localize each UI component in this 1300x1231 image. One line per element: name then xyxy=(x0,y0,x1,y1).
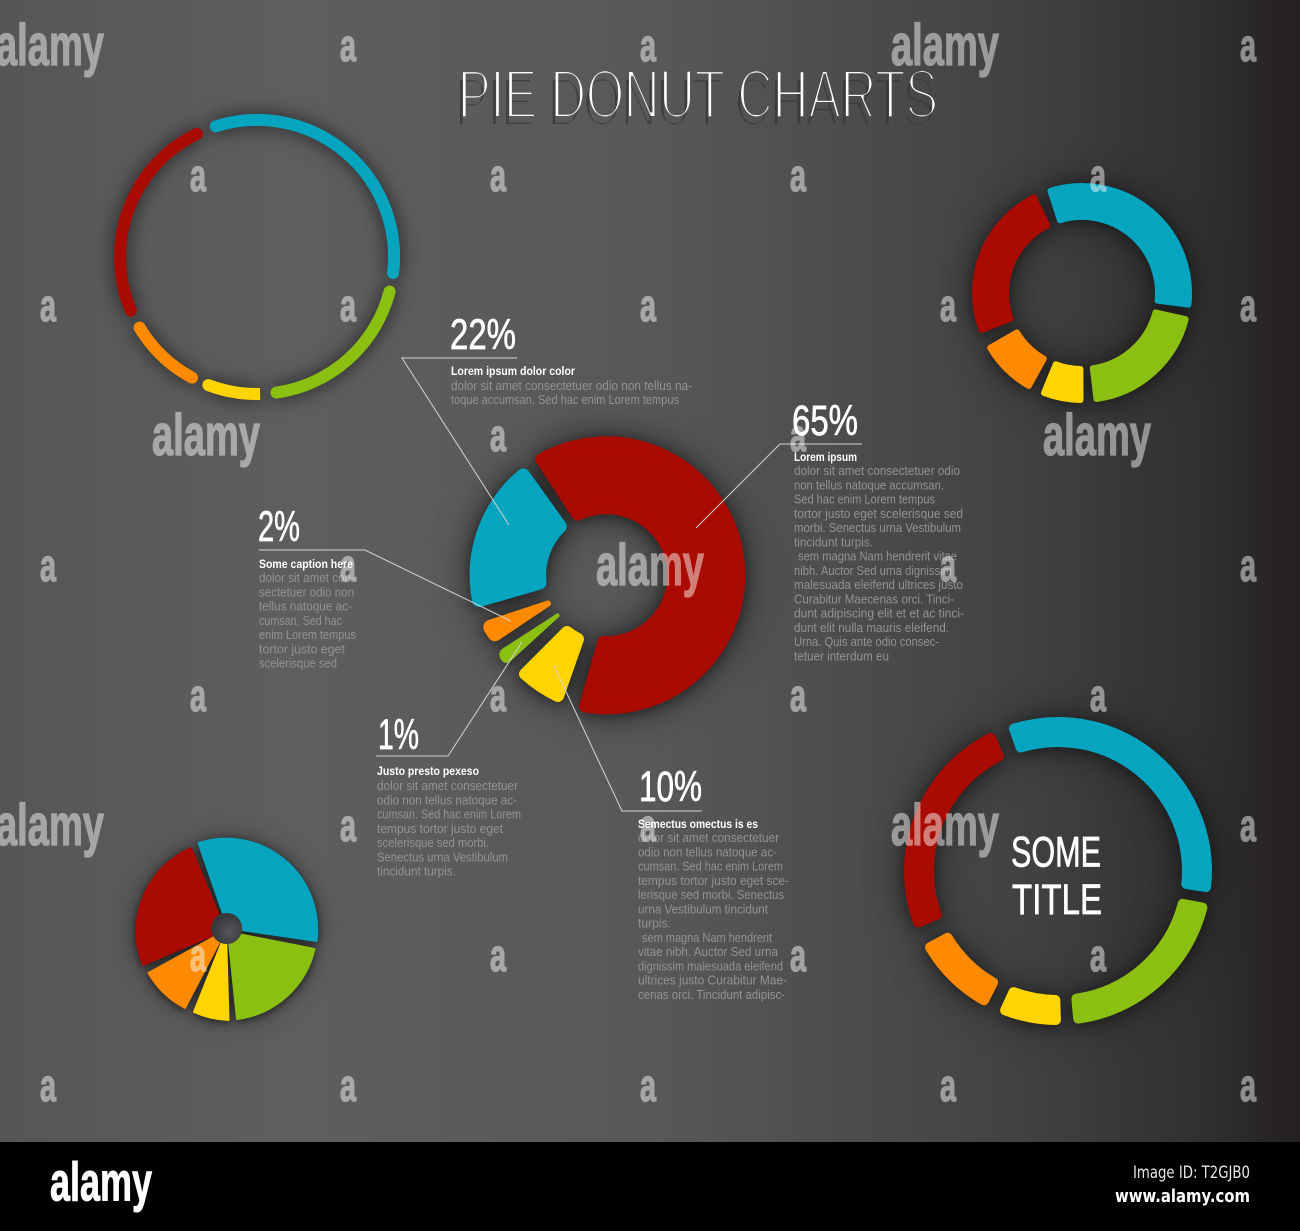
callout: 1%: odio non tellus natoque ac- xyxy=(377,793,517,807)
callout: 2%: Some caption here xyxy=(259,557,353,571)
callout: 1%: dolor sit amet consectetuer xyxy=(377,779,518,793)
callout: 65%: nibh. Auctor Sed urna dignissim xyxy=(794,564,952,578)
leader line: 1% xyxy=(376,642,522,756)
callout: 65%: tincidunt turpis. xyxy=(794,535,873,549)
callout: 10%: dolor sit amet consectetuer xyxy=(638,831,779,845)
callout: 65%: Lorem ipsum xyxy=(794,450,857,464)
donut: yellow segment xyxy=(1044,364,1080,400)
callout: 1%: cumsan. Sed hac enim Lorem xyxy=(377,808,521,822)
watermarks: alamy xyxy=(1043,403,1151,468)
thin ring: yellow segment xyxy=(208,385,260,394)
watermarks: a xyxy=(340,280,357,331)
thin ring: green segment xyxy=(276,292,390,393)
callout: 65%: sem magna Nam hendrerit vitae xyxy=(798,550,957,564)
central donut: blue 22% segment xyxy=(477,476,560,600)
donut chart top right xyxy=(975,186,1189,400)
watermarks: a xyxy=(40,280,57,331)
callout: 10%: lerisque sed morbi. Senectus xyxy=(638,888,784,902)
titled donut: red segment xyxy=(909,738,999,922)
watermarks: a xyxy=(490,410,507,461)
watermarks: a xyxy=(1090,930,1107,981)
leader line: 10% xyxy=(554,666,702,811)
callout: 10%: sem magna Nam hendrerit xyxy=(642,931,772,945)
central donut: yellow 10% segment xyxy=(525,632,578,696)
pie chart bottom left xyxy=(137,839,317,1020)
watermarks: a xyxy=(1240,1060,1257,1111)
callout: 10%: vitae nibh. Auctor Sed urna xyxy=(638,945,778,959)
watermarks: alamy xyxy=(0,13,104,78)
callout: 65%: morbi. Senectus urna Vestibulum xyxy=(794,521,961,535)
callout: 2% xyxy=(258,503,356,671)
watermarks: a xyxy=(490,150,507,201)
centre title of donut: SOME xyxy=(1011,828,1101,876)
callout: 2%: tellus natoque ac- xyxy=(259,600,352,614)
callout: 10% xyxy=(638,763,789,1002)
callout: 2%: 2% xyxy=(258,503,300,551)
callout: 10%: 10% xyxy=(639,763,702,811)
callout: 1%: tempus tortor justo eget xyxy=(377,822,503,836)
footer logo: alamy xyxy=(50,1150,152,1212)
callout: 1%: Justo presto pexeso xyxy=(377,764,479,778)
callout: 2%: sectetuer odio non xyxy=(259,585,354,599)
title xyxy=(455,55,938,141)
callout: 1% xyxy=(377,711,521,879)
watermarks: a xyxy=(340,20,357,71)
central donut: green 1% segment xyxy=(501,616,558,661)
callout: 2%: dolor sit amet con- xyxy=(259,571,355,585)
footer url: www.alamy.com xyxy=(1115,1186,1250,1207)
callout: 1%: 1% xyxy=(378,711,419,759)
pie: red wedge xyxy=(137,848,225,965)
callout: 22%: toque accumsan. Sed hac enim Lorem tempus xyxy=(451,393,679,407)
titled donut: yellow segment xyxy=(1005,992,1056,1020)
watermarks: a xyxy=(490,670,507,721)
watermarks: alamy xyxy=(152,403,260,468)
thin ring: blue segment xyxy=(216,120,394,273)
watermarks: a xyxy=(1090,670,1107,721)
watermarks: a xyxy=(640,800,657,851)
callout: 2%: scelerisque sed xyxy=(259,657,337,671)
callout: 65% xyxy=(792,397,964,664)
callout: 65%: dunt adipiscing elit et et ac tinci- xyxy=(794,607,964,621)
watermarks: a xyxy=(340,1060,357,1111)
watermarks: a xyxy=(1240,800,1257,851)
watermarks: a xyxy=(940,540,957,591)
callout: 10%: urna Vestibulum tincidunt xyxy=(638,902,768,916)
pie: centre hole xyxy=(211,913,242,944)
titled donut: blue segment xyxy=(1014,722,1207,887)
callout: 65%: tortor justo eget scelerisque sed xyxy=(794,507,963,521)
watermarks: a xyxy=(190,150,207,201)
pie: blue wedge xyxy=(198,839,317,941)
callout: 10%: cenas orci. Tincidunt adipisc- xyxy=(638,988,785,1002)
titled donut chart bottom right xyxy=(909,722,1207,1020)
watermarks: a xyxy=(1090,150,1107,201)
callout: 10%: dignissim malesuada eleifend xyxy=(638,959,783,973)
thin ring: orange segment xyxy=(140,328,192,378)
callout: 65%: dunt elit nulla mauris eleifend. xyxy=(794,621,949,635)
watermarks: a xyxy=(190,930,207,981)
donut: blue segment xyxy=(1050,186,1189,305)
watermarks: a xyxy=(1240,540,1257,591)
watermarks: alamy xyxy=(596,533,704,598)
watermarks: a xyxy=(790,670,807,721)
callout: 10%: odio non tellus natoque ac- xyxy=(638,845,777,859)
callout: 65%: Curabitur Maecenas orci. Tinci- xyxy=(794,592,954,606)
watermarks: a xyxy=(940,280,957,331)
callout: 65%: malesuada eleifend ultrices justo xyxy=(794,578,963,592)
callout: 65%: Urna. Quis ante odio consec- xyxy=(794,635,939,649)
callout: 65%: Sed hac enim Lorem tempus xyxy=(794,492,935,506)
callout: 10%: Semectus omectus is es xyxy=(638,817,758,831)
callout: 10%: cumsan. Sed hac enim Lorem xyxy=(638,860,783,874)
watermarks: alamy xyxy=(0,793,104,858)
central donut: red 65% segment xyxy=(542,442,739,708)
donut: green segment xyxy=(1093,312,1186,399)
callout: 22%: 22% xyxy=(450,311,516,359)
footer image id: Image ID: T2GJB0 xyxy=(1133,1163,1250,1183)
donut: red segment xyxy=(975,198,1047,330)
watermarks: a xyxy=(1240,20,1257,71)
watermarks: a xyxy=(790,410,807,461)
leader line: 22% xyxy=(402,358,517,525)
callout: 1%: scelerisque sed morbi. xyxy=(377,836,489,850)
titled donut: green segment xyxy=(1076,904,1202,1019)
callout: 65%: non tellus natoque accumsan. xyxy=(794,478,944,492)
callout: 10%: turpis. xyxy=(638,917,671,931)
callout: 1%: Senectus urna Vestibulum xyxy=(377,850,508,864)
title: PIE DONUT CHARTS xyxy=(458,55,938,133)
watermarks: a xyxy=(640,280,657,331)
leader line: 65% xyxy=(696,444,862,528)
pie: yellow wedge xyxy=(194,932,228,1020)
callout: 10%: tempus tortor justo eget sce- xyxy=(638,874,789,888)
watermarks: a xyxy=(40,540,57,591)
centre title of donut: TITLE xyxy=(1012,876,1102,924)
pie: orange wedge xyxy=(148,931,225,1008)
watermarks: a xyxy=(790,150,807,201)
callout: 22%: dolor sit amet consectetuer odio non tellus na- xyxy=(451,379,692,393)
thin ring: red segment xyxy=(120,134,197,310)
watermarks: a xyxy=(40,1060,57,1111)
watermarks: a xyxy=(940,1060,957,1111)
thin ring chart xyxy=(120,120,394,394)
watermarks: a xyxy=(190,670,207,721)
callout: 2%: cumsan. Sed hac xyxy=(259,614,342,628)
watermarks: a xyxy=(340,540,357,591)
watermarks: a xyxy=(640,20,657,71)
donut: orange segment xyxy=(990,332,1044,386)
callout: 65%: dolor sit amet consectetuer odio xyxy=(794,464,960,478)
callout: 2%: enim Lorem tempus xyxy=(259,628,356,642)
watermarks: a xyxy=(790,930,807,981)
thin ring: yellow cap xyxy=(202,379,214,391)
central donut: orange 2% segment xyxy=(486,604,548,638)
pie: green wedge xyxy=(228,932,314,1019)
callout: 22%: Lorem ipsum dolor color xyxy=(451,364,575,378)
leader line: 2% xyxy=(259,550,511,621)
watermarks: alamy xyxy=(891,793,999,858)
watermarks: a xyxy=(1240,280,1257,331)
callout: 65%: 65% xyxy=(792,397,858,445)
watermarks: a xyxy=(640,1060,657,1111)
watermarks: a xyxy=(340,800,357,851)
title: PIE DONUT CHARTS xyxy=(455,63,935,141)
watermarks: a xyxy=(490,930,507,981)
callout: 65%: tetuer interdum eu xyxy=(794,650,889,664)
callout: 1%: tincidunt turpis. xyxy=(377,865,456,879)
callout: 22% xyxy=(450,311,692,407)
callout: 2%: tortor justo eget xyxy=(259,642,346,656)
central exploded donut chart xyxy=(477,442,739,708)
titled donut: orange segment xyxy=(930,938,993,1000)
footer bar xyxy=(0,1142,1300,1231)
centre title of donut xyxy=(1011,828,1102,924)
callout: 10%: ultrices justo Curabitur Mae- xyxy=(638,974,787,988)
watermarks: alamy xyxy=(891,13,999,78)
